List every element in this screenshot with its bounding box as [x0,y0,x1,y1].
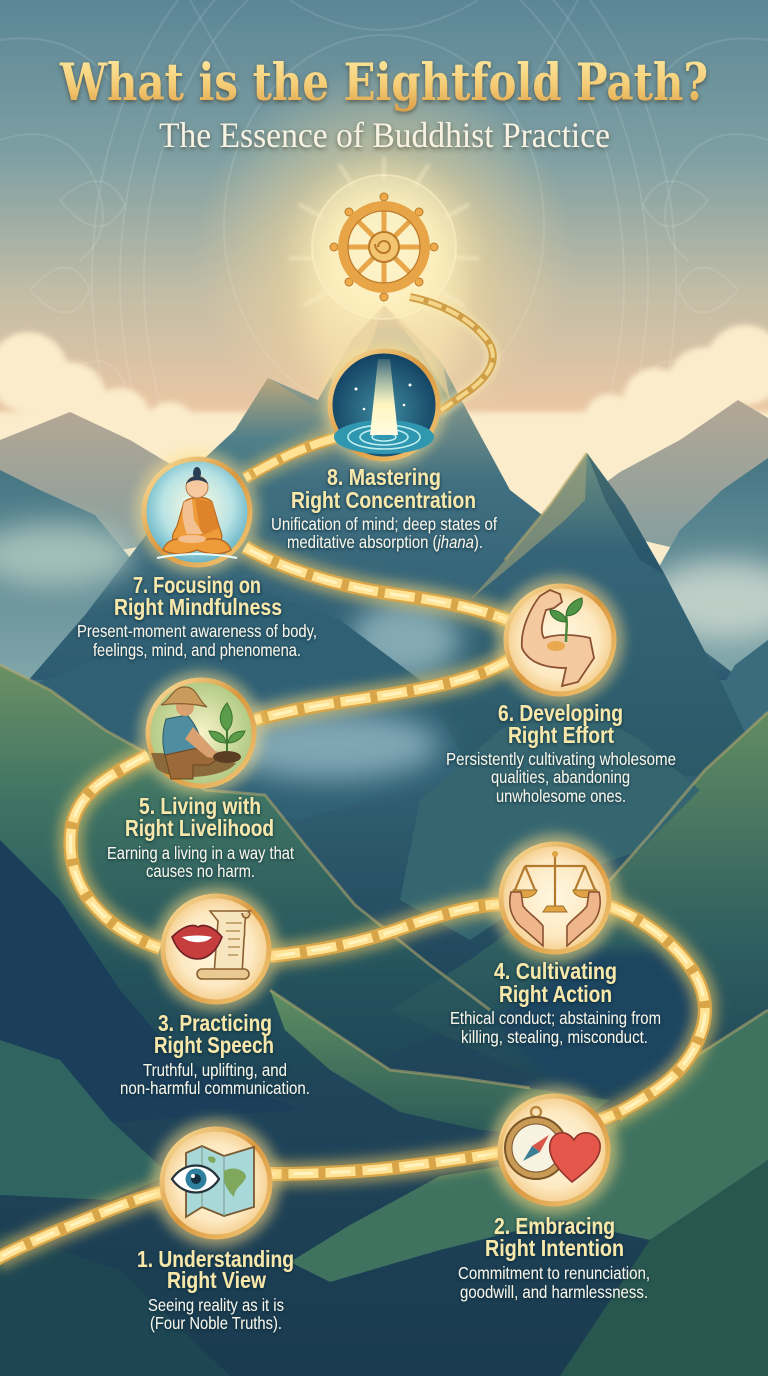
text: step 6: Right Effort [508,722,614,748]
text: step 6 [446,700,676,806]
text: step 5: causes no harm. [146,861,255,881]
text: step 3: Right Speech [154,1032,274,1058]
text: step 8: Right Concentration [291,487,476,513]
icon: flexed arm with sprout [522,590,594,686]
icon: compass and heart [505,1107,600,1182]
text: step 3: Truthful, uplifting, and [143,1060,287,1080]
subtitle: The Essence of Buddhist Practice [159,115,610,155]
text: step 7: Right Mindfulness [114,594,282,620]
text: step 2 [458,1213,650,1302]
step 5: Right Livelihood medallion [139,671,263,795]
text: step 3: 3. Practicing [158,1010,272,1036]
text: step 7: feelings, mind, and phenomena. [93,640,301,660]
text: step 4: killing, stealing, misconduct. [461,1027,648,1047]
text: step 6: 6. Developing [498,700,623,726]
step 3: Right Speech medallion [154,887,278,1011]
text: step 6: Persistently cultivating wholesome [446,749,676,769]
text: step 1 [137,1246,294,1333]
text: step 8 [271,464,497,552]
text: step 6: unwholesome ones. [496,786,626,806]
icon: lips and scroll [172,911,250,979]
text: step 7: 7. Focusing on [133,572,261,598]
text: step 8: Unification of mind; deep states of [271,514,497,534]
step 2: Right Intention medallion [490,1086,618,1214]
text: step 1: 1. Understanding [137,1246,294,1272]
text: step 1: Right View [167,1267,266,1293]
text: step 1: Seeing reality as it is [148,1295,284,1315]
text: step 4: 4. Cultivating [494,958,617,984]
text: step 2: 2. Embracing [494,1213,615,1239]
text: step 3 [120,1010,310,1098]
step 6: Right Effort medallion [496,576,624,704]
icon: meditating Buddha [157,467,237,558]
step 1: Right View medallion [152,1119,280,1247]
text: step 4: Ethical conduct; abstaining from [450,1008,661,1028]
text: step 5 [107,793,294,881]
text: step 5: Earning a living in a way that [107,843,294,863]
text: step 5: 5. Living with [139,793,261,819]
text: step 5: Right Livelihood [125,815,274,841]
text: step 2: Commitment to renunciation, [458,1263,650,1283]
text: step 8: meditative absorption (jhana). [287,532,483,552]
text: step 3: non-harmful communication. [120,1078,310,1098]
step 4: Right Action medallion [491,834,619,962]
text: step 7 [77,572,317,660]
text: step 4 [450,958,661,1047]
chain path linking the eight steps [0,297,705,1260]
text: step 7: Present-moment awareness of body, [77,621,317,641]
text: step 2: goodwill, and harmlessness. [460,1282,648,1302]
text: step 1: (Four Noble Truths). [150,1313,282,1333]
text: step 6: qualities, abandoning [491,767,630,787]
icon: dharma wheel with sun [290,158,478,319]
text: step 4: Right Action [499,981,612,1007]
step 8: Right Concentration medallion [322,343,446,467]
icon: light beam over pond [334,359,434,454]
text: step 2: Right Intention [485,1235,624,1261]
text: step 8: 8. Mastering [327,464,441,490]
icon: scales held by hands [510,851,600,946]
step 7: Right Mindfulness medallion [135,450,259,574]
icon: farmer planting a sprout [151,687,245,779]
icon: eye over map [172,1146,254,1217]
